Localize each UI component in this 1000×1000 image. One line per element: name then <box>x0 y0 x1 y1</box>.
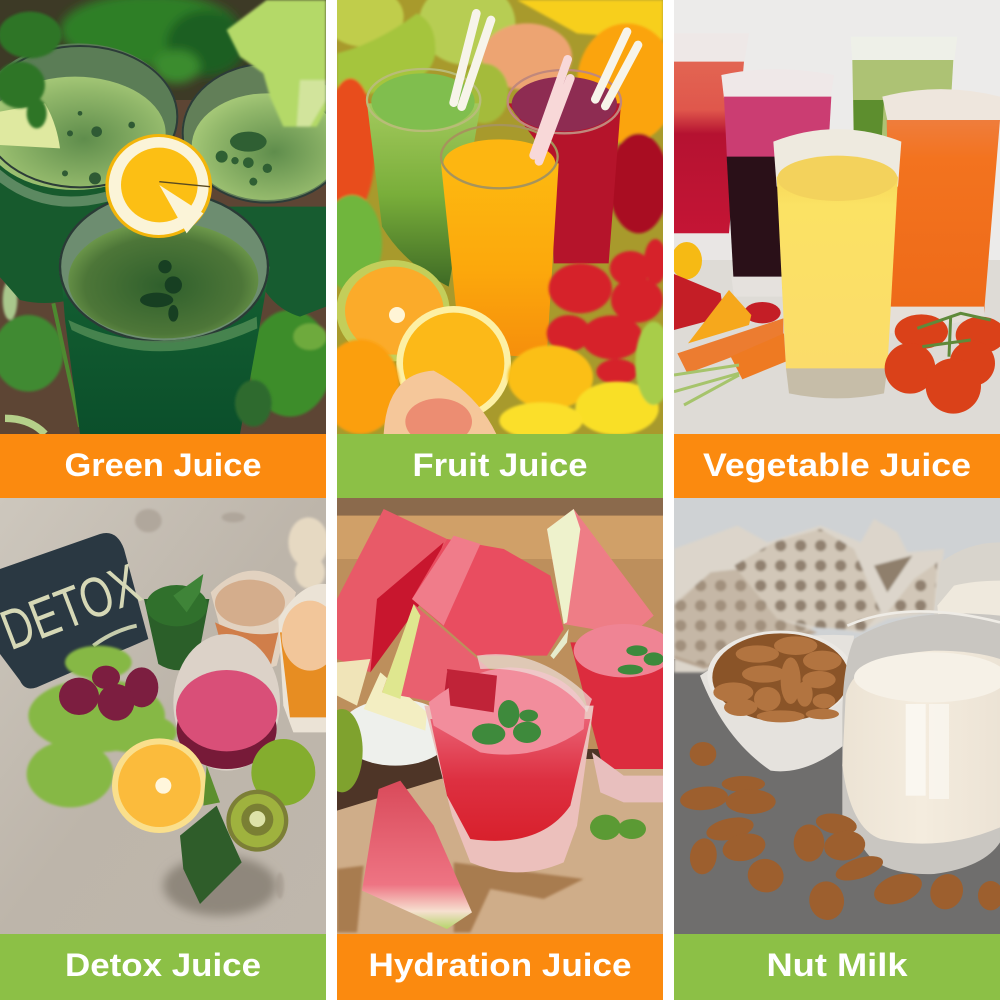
cloth <box>674 519 944 672</box>
icon: orange pepper <box>688 290 751 343</box>
icon: guava <box>384 370 496 434</box>
panel: nut milk <box>674 497 1000 1000</box>
photo: fruit juices and fruit <box>337 0 663 434</box>
stem and cucumber <box>53 303 80 427</box>
label: hydration juice: Hydration Juice <box>368 947 632 983</box>
panel: hydration juice <box>321 497 674 1000</box>
watermelon slices <box>337 509 569 731</box>
glass: milk <box>842 611 1000 874</box>
glass: yellow juice <box>773 129 901 398</box>
photo: vegetable juices <box>671 0 1000 434</box>
lime <box>321 709 363 792</box>
icon: ginger <box>288 517 328 589</box>
glass: back right <box>182 64 326 316</box>
icon: lettuce <box>27 646 177 807</box>
glass: orange juice <box>441 125 559 356</box>
plate <box>339 699 452 766</box>
label: nut milk: Nut Milk <box>766 947 908 983</box>
glass: green juice <box>367 69 481 287</box>
glass: back left <box>0 43 177 303</box>
glass: back milk <box>934 542 1000 662</box>
icon: strawberries <box>547 239 667 384</box>
icon: lime <box>251 739 315 806</box>
lime wedge <box>0 103 60 148</box>
icon: kiwi <box>226 790 288 852</box>
icon: mint main <box>472 700 541 745</box>
glass: brown juice <box>211 571 296 670</box>
label: fruit juice <box>337 434 663 498</box>
icon: lemon slice <box>105 134 212 238</box>
wedge on right glass <box>547 509 654 636</box>
icon: beets <box>59 666 158 721</box>
board <box>337 759 663 934</box>
label: green juice <box>0 434 326 498</box>
label: hydration juice <box>337 934 663 1000</box>
panel: fruit juice <box>321 0 677 498</box>
label: detox juice: Detox Juice <box>65 947 261 983</box>
glass: carrot juice <box>882 89 1000 333</box>
label: detox juice <box>0 934 326 1000</box>
icon: left broccoli <box>0 280 63 392</box>
panel: detox juice <box>0 497 338 1000</box>
label: nut milk <box>674 934 1000 1000</box>
label: vegetable juice <box>674 434 1000 498</box>
wedge on main glass <box>382 604 497 712</box>
glass: orange juice <box>278 584 338 732</box>
icon: mint on board <box>590 815 646 840</box>
glass: red juice <box>674 62 744 234</box>
label: vegetable juice: Vegetable Juice <box>703 447 971 483</box>
glass: beet juice <box>721 71 832 277</box>
icon: orange slices <box>336 260 511 421</box>
shadow under spinach <box>163 856 277 916</box>
detox chalkboard sign <box>0 533 149 689</box>
icon: bottom right parsley <box>235 380 272 427</box>
photo: watermelon juice <box>321 497 674 934</box>
icon: mint right <box>618 645 664 675</box>
panel: vegetable juice <box>671 0 1000 498</box>
icon: celery <box>227 0 326 127</box>
almonds on table <box>679 742 1000 923</box>
icon: red pepper <box>674 274 781 330</box>
label: fruit juice: Fruit Juice <box>412 447 588 483</box>
icon: tomatoes <box>885 313 1000 414</box>
label: green juice: Green Juice <box>64 447 262 483</box>
glass: beet juice <box>173 634 280 771</box>
glass: red juice <box>508 70 621 263</box>
icon: carrots <box>674 318 786 405</box>
photo: detox ingredients <box>0 497 338 934</box>
photo: almond milk <box>674 497 1000 934</box>
glass: front <box>59 191 270 434</box>
glass: spinach juice <box>144 574 209 670</box>
icon: lemons and guava <box>337 320 663 434</box>
icon: right broccoli <box>248 310 332 417</box>
glass: green juice <box>852 60 954 137</box>
icon: orange half <box>112 738 207 833</box>
straws <box>454 13 638 161</box>
icon: yellow pepper small <box>671 242 702 279</box>
top fruit <box>322 0 677 292</box>
photo: green juice glasses <box>0 0 352 434</box>
glass: small juice <box>570 624 674 802</box>
icon: parsley <box>0 12 62 128</box>
bowl with almonds <box>700 631 854 771</box>
icon: watermelon wedge <box>362 781 472 929</box>
icon: spinach <box>180 766 242 904</box>
glass: main juice <box>424 654 594 872</box>
panel: green juice <box>0 0 352 498</box>
